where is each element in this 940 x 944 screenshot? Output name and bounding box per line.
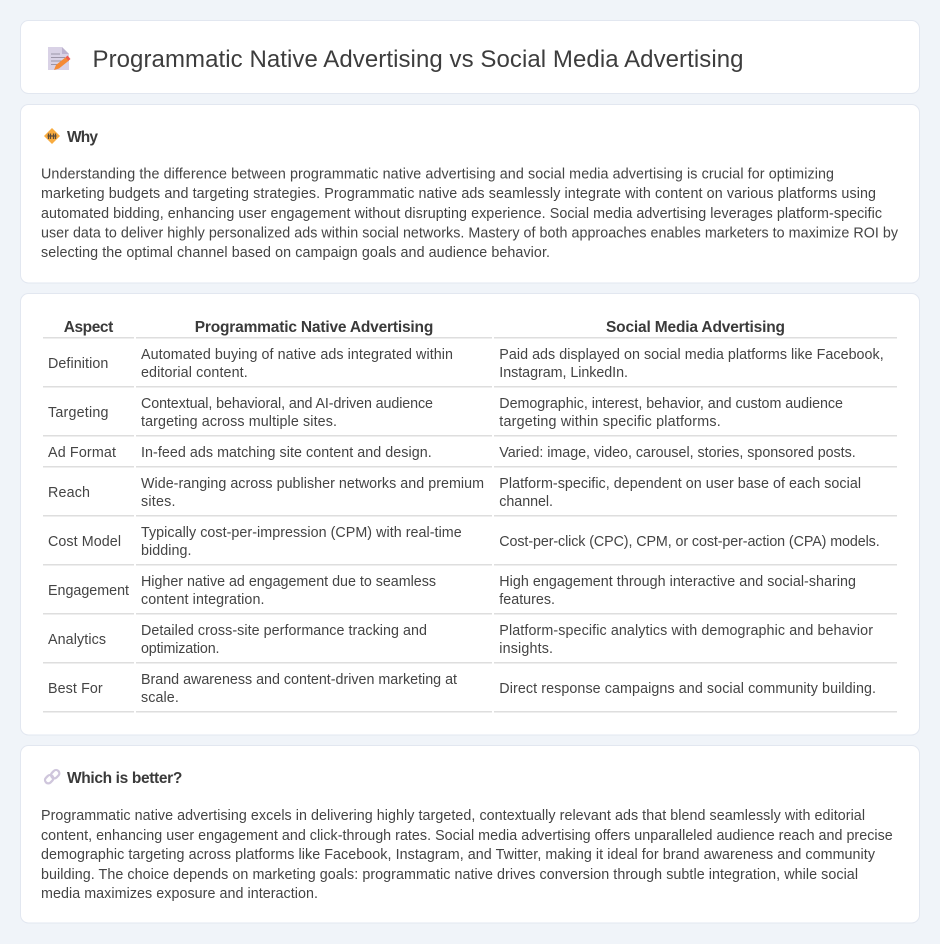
icon: memo with pencil — [48, 47, 70, 70]
row: engagement: Higher native ad engagement due to seamless — [141, 574, 436, 590]
text block: why explanation: Understanding the difference between programmatic native advertising and social media advertising is crucial for optimizing — [41, 167, 834, 183]
row: engagement — [48, 574, 856, 608]
row: analytics: Platform-specific analytics with demographic and behavior — [499, 623, 873, 639]
panel: comparison table — [20, 294, 920, 735]
row: best for: Direct response campaigns and social community building. — [499, 681, 876, 697]
table header row — [64, 319, 785, 336]
row: engagement: features. — [499, 592, 555, 608]
panel: which is better — [20, 746, 920, 923]
text block: verdict: content, enhancing user engagement and click-through rates. Social media advertising offers unparalleled audience reach and precise — [41, 828, 893, 844]
row: analytics: insights. — [499, 641, 553, 657]
text block: why explanation: marketing budgets and targeting strategies. Programmatic native ads seamlessly integrate with content on various platforms using — [41, 186, 876, 202]
table header row: Programmatic Native Advertising — [195, 319, 433, 336]
heading: why: Why — [67, 129, 98, 146]
text block: verdict: building. The choice depends on marketing goals: programmatic native drives conversion through subtle integration, while social — [41, 867, 858, 883]
text block: verdict — [41, 808, 893, 902]
row: ad format: In-feed ads matching site content and design. — [141, 445, 432, 461]
row: engagement: High engagement through interactive and social-sharing — [499, 574, 856, 590]
row: analytics — [48, 623, 873, 657]
row: best for: scale. — [141, 690, 179, 706]
text block: why explanation: selecting the optimal channel based on campaign goals and audience behavior. — [41, 245, 550, 261]
row: reach: sites. — [141, 494, 176, 510]
heading: which is better: Which is better? — [67, 770, 182, 787]
row: ad format: Ad Format — [48, 445, 116, 461]
panel: why — [20, 104, 920, 283]
table header row: Aspect — [64, 319, 113, 336]
row: reach: channel. — [499, 494, 553, 510]
row: engagement: Engagement — [48, 583, 129, 599]
row: definition: Paid ads displayed on social media platforms like Facebook, — [499, 347, 884, 363]
row: engagement: content integration. — [141, 592, 264, 608]
row: cost model: bidding. — [141, 543, 192, 559]
text block: why explanation: automated bidding, enhancing user engagement without disrupting experience. Social media advertising leverages platform-specific — [41, 206, 882, 222]
row: reach: Reach — [48, 485, 90, 501]
row: best for — [48, 672, 876, 706]
row: cost model — [48, 525, 880, 559]
text block: verdict: Programmatic native advertising excels in delivering highly targeted, contextually relevant ads that blend seamlessly with editorial — [41, 808, 865, 824]
row: best for: Best For — [48, 681, 103, 697]
row: ad format: Varied: image, video, carousel, stories, sponsored posts. — [499, 445, 856, 461]
text block: verdict: media maximizes exposure and interaction. — [41, 886, 318, 902]
panel: title header — [20, 20, 920, 94]
row: reach — [48, 476, 861, 510]
text block: verdict: demographic targeting across platforms like Facebook, Instagram, and Twitter, making it ideal for brand awareness and community — [41, 847, 876, 863]
row: definition — [48, 347, 884, 381]
row: best for: Brand awareness and content-driven marketing at — [141, 672, 457, 688]
row: reach: Platform-specific, dependent on user base of each social — [499, 476, 861, 492]
row: targeting: targeting within specific platforms. — [499, 414, 721, 430]
row: definition: Definition — [48, 356, 108, 372]
row: targeting: Targeting — [48, 405, 109, 421]
row: analytics: Analytics — [48, 632, 106, 648]
row: definition: Instagram, LinkedIn. — [499, 365, 628, 381]
row: targeting: Demographic, interest, behavior, and custom audience — [499, 396, 843, 412]
row: cost model: Cost Model — [48, 534, 121, 550]
table header row: Social Media Advertising — [606, 319, 785, 336]
title: Programmatic Native Advertising vs Social Media Advertising — [92, 46, 744, 73]
row: ad format — [48, 445, 856, 461]
row: analytics: optimization. — [141, 641, 220, 657]
row: analytics: Detailed cross-site performance tracking and — [141, 623, 427, 639]
row: targeting — [48, 396, 843, 430]
row: cost model: Typically cost-per-impression (CPM) with real-time — [141, 525, 462, 541]
row: cost model: Cost-per-click (CPC), CPM, or cost-per-action (CPA) models. — [499, 534, 880, 550]
row: reach: Wide-ranging across publisher networks and premium — [141, 476, 484, 492]
row: definition: editorial content. — [141, 365, 248, 381]
row: definition: Automated buying of native ads integrated within — [141, 347, 453, 363]
row: targeting: targeting across multiple sites. — [141, 414, 337, 430]
row: targeting: Contextual, behavioral, and AI-driven audience — [141, 396, 433, 412]
text block: why explanation — [41, 167, 899, 261]
icon: chain link — [44, 769, 61, 785]
text block: why explanation: user data to deliver highly personalized ads within social networks. Mastery of both approaches enables marketers to maximize ROI by — [41, 225, 899, 241]
icon: orange diamond sign — [44, 128, 60, 144]
